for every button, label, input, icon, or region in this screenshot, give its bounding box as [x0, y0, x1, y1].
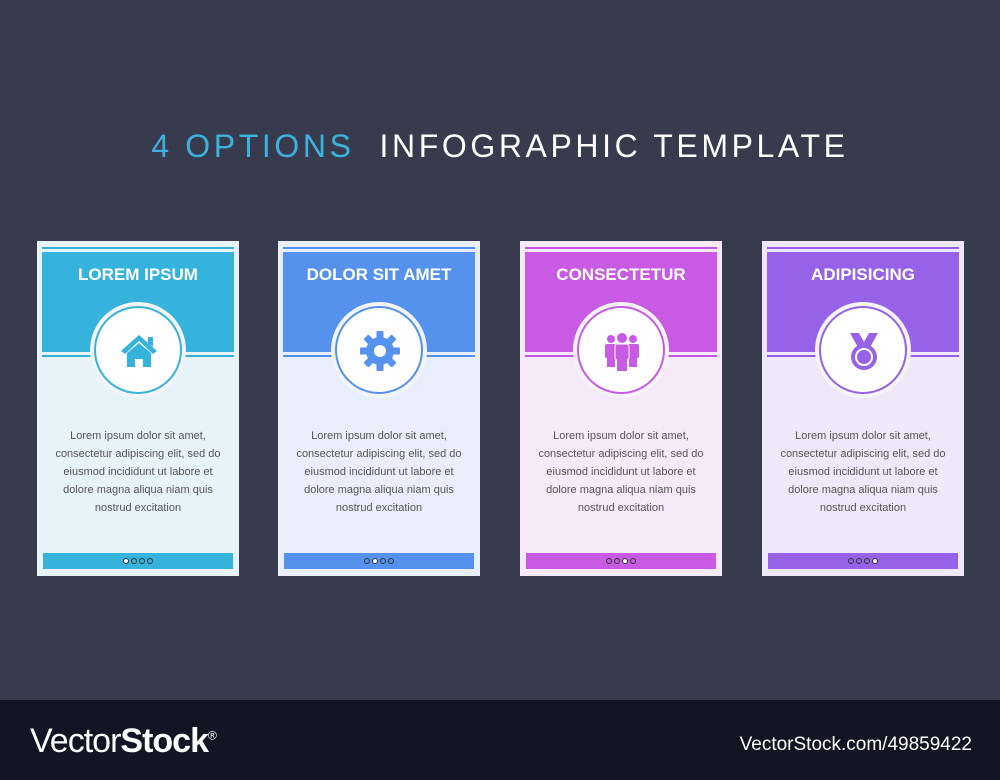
- title: 4 OPTIONS INFOGRAPHIC TEMPLATE: [151, 128, 849, 164]
- card 3: [520, 241, 722, 576]
- header 4: ADIPISICING: [811, 265, 915, 284]
- header 2: DOLOR SIT AMET: [307, 265, 451, 284]
- card 1: [37, 241, 239, 576]
- footer: [0, 700, 1000, 780]
- icon: medal: [815, 302, 911, 398]
- header 4: [767, 252, 959, 352]
- icon: gear: [331, 302, 427, 398]
- card 2: [278, 241, 480, 576]
- bottom bar 4: [768, 553, 958, 569]
- text 4: Lorem ipsum dolor sit amet, consectetur adipiscing elit, sed do eiusmod incididunt ut labore et dolore magna aliqua niam quis nostrud excitation: [780, 430, 946, 514]
- header 1: [42, 252, 234, 352]
- card 4: [762, 241, 964, 576]
- header 3: CONSECTETUR: [556, 265, 686, 284]
- icon: people: [573, 302, 669, 398]
- bottom bar 3: [526, 553, 716, 569]
- header 1: LOREM IPSUM: [78, 265, 198, 284]
- icon: house: [90, 302, 186, 398]
- text 1: Lorem ipsum dolor sit amet, consectetur adipiscing elit, sed do eiusmod incididunt ut labore et dolore magna aliqua niam quis nostrud excitation: [55, 430, 221, 514]
- bottom bar 1: [43, 553, 233, 569]
- bottom bar 2: [284, 553, 474, 569]
- footer logo: VectorStock®: [30, 722, 216, 760]
- footer url: VectorStock.com/49859422: [740, 734, 972, 755]
- text 3: Lorem ipsum dolor sit amet, consectetur adipiscing elit, sed do eiusmod incididunt ut labore et dolore magna aliqua niam quis nostrud excitation: [538, 430, 704, 514]
- header 2: [283, 252, 475, 352]
- text 2: Lorem ipsum dolor sit amet, consectetur adipiscing elit, sed do eiusmod incididunt ut labore et dolore magna aliqua niam quis nostrud excitation: [296, 430, 462, 514]
- header 3: [525, 252, 717, 352]
